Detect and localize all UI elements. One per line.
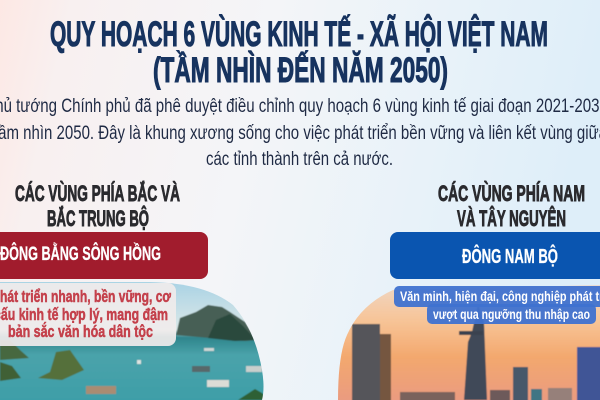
- photo: Ho Chi Minh City skyline: [335, 285, 600, 400]
- blue box: Dong Nam Bo: [390, 232, 600, 279]
- callout: red region description: cấu kinh tế hợp lý, mang đậm: [0, 305, 168, 324]
- title: (TẦM NHÌN ĐẾN NĂM 2050): [153, 50, 448, 90]
- intro text: [0, 96, 600, 170]
- callout: red region description: bản sắc văn hóa dân tộc: [8, 322, 153, 341]
- heading: northern regions: BẮC TRUNG BỘ: [47, 206, 149, 231]
- title: [50, 14, 548, 90]
- heading: northern regions: [15, 181, 180, 231]
- red box: Dong bang song Hong: [0, 232, 208, 279]
- intro text: các tỉnh thành trên cả nước.: [206, 149, 393, 170]
- heading: southern regions: [438, 181, 585, 231]
- photo: Ha Long bay: [0, 280, 270, 400]
- red box: Dong bang song Hong: ĐÔNG BẰNG SÔNG HỒNG: [0, 243, 161, 265]
- callout: red region description: [0, 283, 176, 346]
- heading: northern regions: CÁC VÙNG PHÍA BẮC VÀ: [15, 181, 180, 206]
- callout: blue region description: [394, 286, 600, 324]
